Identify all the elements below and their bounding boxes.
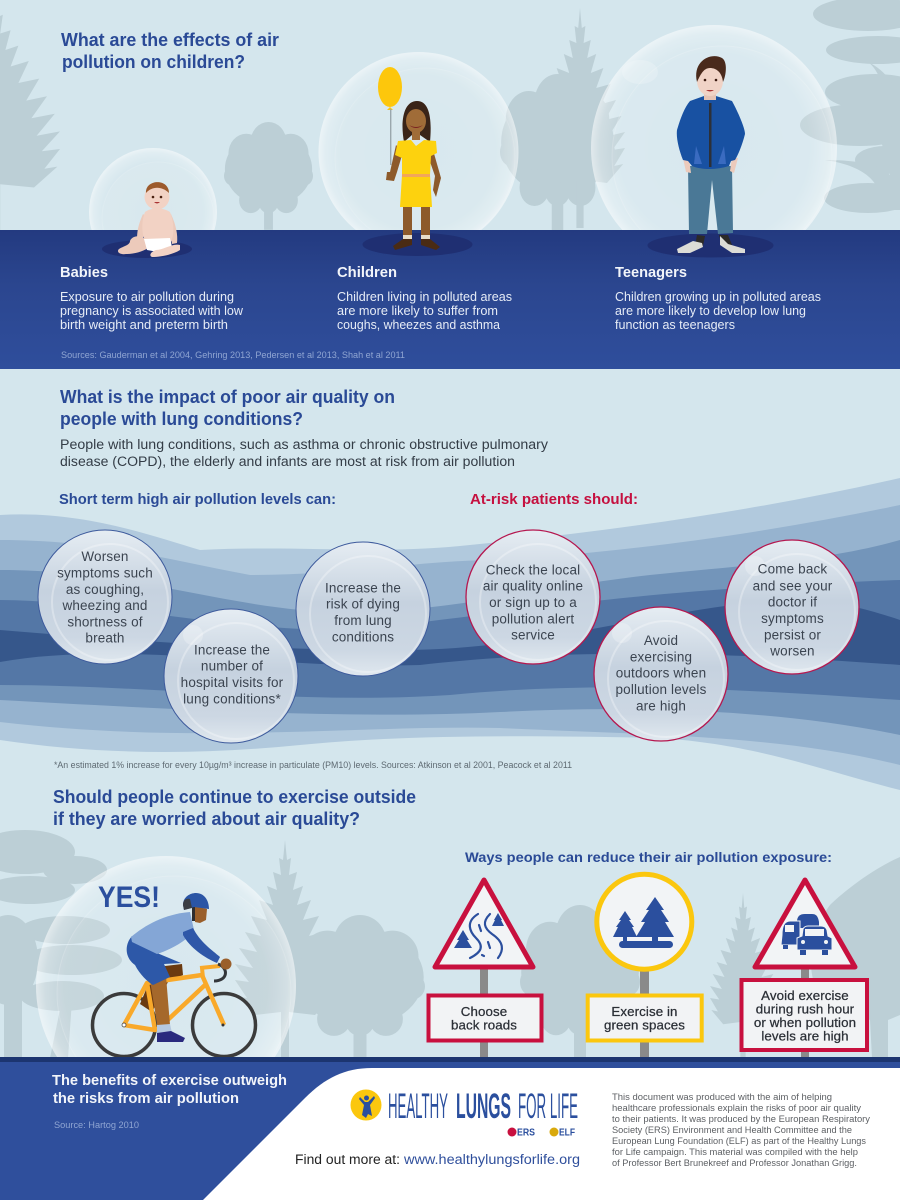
sign: green spaces bbox=[588, 874, 702, 1058]
bubble: worsen symptoms: breath bbox=[85, 631, 125, 646]
find out more link bbox=[295, 1152, 580, 1167]
logo: Healthy Lungs for Life: ELF bbox=[559, 1128, 575, 1138]
bubble: see your doctor: persist or bbox=[764, 627, 821, 642]
bubble: see your doctor bbox=[725, 540, 859, 674]
text block: benefits bbox=[52, 1072, 287, 1107]
bubble: risk of dying: from lung bbox=[334, 613, 392, 628]
text block: teenagers: Children growing up in polluted areas bbox=[615, 290, 821, 304]
panel: footer: FOR LIFE bbox=[518, 1087, 578, 1126]
bubble: child bbox=[318, 52, 518, 252]
sign: green spaces: Exercise in bbox=[611, 1004, 678, 1019]
bubble: hospital visits: hospital visits for bbox=[181, 675, 284, 690]
bubble: check air quality: pollution alert bbox=[492, 611, 574, 626]
icon: trees bbox=[613, 897, 674, 948]
figure: child with balloon bbox=[378, 67, 441, 250]
ground line bbox=[0, 1057, 900, 1062]
text block: children bbox=[337, 265, 512, 332]
logo: Healthy Lungs for Life: ERS bbox=[517, 1128, 535, 1138]
sign: rush hour: during rush hour bbox=[756, 1002, 855, 1017]
disclaimer paragraph: This document was produced with the aim of helping bbox=[612, 1092, 832, 1102]
navy band bbox=[0, 230, 900, 369]
text block: babies: Exposure to air pollution during bbox=[60, 290, 234, 304]
bubble: baby bbox=[89, 148, 217, 276]
bubble: risk of dying: conditions bbox=[332, 629, 394, 644]
sign: green spaces: green spaces bbox=[604, 1018, 685, 1032]
icon: traffic cars bbox=[781, 914, 832, 955]
panel: effects on children bbox=[0, 0, 900, 369]
shadow: child bbox=[362, 233, 472, 256]
background trees bottom bbox=[0, 830, 900, 1060]
bubble: avoid exercising: outdoors when bbox=[616, 666, 706, 681]
disclaimer paragraph: Society (ERS) Environment and Health Committee and the bbox=[612, 1125, 852, 1135]
bubble: hospital visits: lung conditions* bbox=[183, 691, 281, 706]
bubble: worsen symptoms: Worsen bbox=[81, 549, 129, 564]
sign: rush hour bbox=[742, 880, 867, 1058]
find out more link: www.healthylungsforlife.org bbox=[403, 1152, 580, 1167]
bubble: risk of dying: Increase the bbox=[325, 580, 401, 595]
panel: footer bbox=[0, 1057, 900, 1200]
logo: Healthy Lungs for Life: HEALTHY bbox=[388, 1087, 448, 1126]
bubble: avoid exercising: Avoid bbox=[644, 633, 678, 648]
panel: lung conditions bbox=[0, 387, 900, 790]
bubble: check air quality: Check the local bbox=[486, 562, 580, 577]
background trees top bbox=[0, 0, 900, 237]
bubble: check air quality bbox=[466, 530, 600, 664]
subheading: at-risk: At-risk patients should: bbox=[470, 491, 638, 508]
bubble: check air quality: air quality online bbox=[483, 579, 583, 594]
bubble: see your doctor: Come back bbox=[758, 562, 827, 577]
bubble: hospital visits bbox=[164, 609, 298, 743]
bubble: check air quality: or sign up to a bbox=[489, 595, 577, 610]
sign: rush hour: or when pollution bbox=[754, 1015, 856, 1030]
intro text bbox=[60, 437, 548, 469]
pollution waves bbox=[0, 478, 900, 790]
heading: exercise bbox=[53, 787, 416, 829]
text block: benefits: the risks from air pollution bbox=[53, 1090, 239, 1107]
disclaimer paragraph: of Professor Bert Brunekreef and Professor Jonathan Grigg. bbox=[612, 1158, 857, 1168]
shadow: baby bbox=[102, 240, 192, 258]
logo: Healthy Lungs for Life bbox=[350, 1087, 578, 1138]
sign: rush hour: Avoid exercise bbox=[761, 988, 849, 1003]
bubble: avoid exercising bbox=[594, 607, 728, 741]
figure: teenager bbox=[677, 56, 745, 253]
logo: Healthy Lungs for Life: LUNGS bbox=[456, 1087, 511, 1126]
bubble: avoid exercising: exercising bbox=[630, 650, 692, 665]
subheading: ways to reduce: Ways people can reduce their air pollution exposure: bbox=[465, 849, 832, 865]
disclaimer paragraph: to their patients. It was produced by the European Respiratory bbox=[612, 1114, 871, 1124]
bubble: teenager bbox=[591, 25, 837, 271]
title: effects on children: pollution on children? bbox=[62, 52, 245, 72]
heading: lung conditions: people with lung conditions? bbox=[60, 409, 303, 429]
title: effects on children: What are the effects of air bbox=[61, 30, 279, 50]
disclaimer paragraph: for Life campaign. This material was compiled with the help bbox=[612, 1147, 858, 1157]
subheading: short term: Short term high air pollution levels can: bbox=[59, 491, 336, 508]
shadow: teenager bbox=[648, 234, 774, 258]
white footer panel bbox=[203, 1068, 900, 1200]
text block: benefits: The benefits of exercise outweigh bbox=[52, 1072, 287, 1089]
text block: babies bbox=[60, 265, 244, 332]
sign: back roads bbox=[428, 880, 542, 1058]
bubble: avoid exercising: pollution levels bbox=[616, 682, 707, 697]
text block: teenagers bbox=[615, 265, 821, 332]
bubble: see your doctor: and see your bbox=[753, 578, 833, 593]
text block: babies: Babies bbox=[60, 265, 108, 281]
bubble: worsen symptoms: shortness of bbox=[67, 615, 143, 630]
bubble: worsen symptoms: wheezing and bbox=[61, 598, 148, 613]
footnote: *An estimated 1% increase for every 10µg/m³ increase in particulate (PM10) levels. Sources: Atkinson et al 2001, Peacock et al 2011 bbox=[54, 760, 572, 770]
text block: teenagers: Teenagers bbox=[615, 265, 687, 281]
bubble: hospital visits: number of bbox=[201, 659, 263, 674]
bubble: risk of dying: risk of dying bbox=[326, 597, 400, 612]
bubble: worsen symptoms: symptoms such bbox=[57, 566, 153, 581]
heading: lung conditions bbox=[60, 387, 395, 429]
bubble: worsen symptoms: as coughing, bbox=[66, 582, 144, 597]
bubble: worsen symptoms bbox=[38, 530, 172, 664]
text block: babies: birth weight and preterm birth bbox=[60, 318, 228, 332]
bubble: hospital visits: Increase the bbox=[194, 642, 270, 657]
sign: back roads: back roads bbox=[451, 1018, 517, 1032]
text block: children: are more likely to suffer from bbox=[337, 304, 498, 318]
bubble: see your doctor: doctor if bbox=[768, 595, 817, 610]
heading: exercise: if they are worried about air quality? bbox=[53, 809, 360, 829]
icon: winding road bbox=[454, 913, 504, 958]
title: effects on children bbox=[61, 30, 279, 72]
sign: rush hour: levels are high bbox=[761, 1029, 849, 1044]
sign: back roads: Choose bbox=[461, 1004, 507, 1019]
bubble: cyclist bbox=[36, 856, 296, 1116]
disclaimer paragraph: European Lung Foundation (ELF) as part of the Healthy Lungs bbox=[612, 1136, 866, 1146]
intro text: People with lung conditions, such as asthma or chronic obstructive pulmonary bbox=[60, 437, 548, 452]
bubble: see your doctor: symptoms bbox=[761, 611, 824, 626]
intro text: disease (COPD), the elderly and infants are most at risk from air pollution bbox=[60, 454, 515, 469]
disclaimer paragraph: healthcare professionals explain the risks of poor air quality bbox=[612, 1103, 862, 1113]
panel: exercise bbox=[0, 787, 900, 1116]
bubble: see your doctor: worsen bbox=[769, 644, 815, 659]
text block: children: coughs, wheezes and asthma bbox=[337, 318, 500, 332]
footer band bbox=[0, 1062, 900, 1200]
bubble: risk of dying bbox=[296, 542, 430, 676]
bubble: avoid exercising: are high bbox=[636, 698, 686, 713]
text block: children: Children living in polluted areas bbox=[337, 290, 512, 304]
text block: teenagers: function as teenagers bbox=[615, 318, 735, 332]
text block: children: Children bbox=[337, 265, 397, 281]
text block: babies: pregnancy is associated with low bbox=[60, 304, 244, 318]
bubble: check air quality: service bbox=[511, 627, 555, 642]
heading: lung conditions: What is the impact of poor air quality on bbox=[60, 387, 395, 407]
heading: exercise: Should people continue to exercise outside bbox=[53, 787, 416, 807]
figure: cyclist bbox=[92, 893, 256, 1056]
figure: baby bbox=[118, 182, 180, 257]
source: Hartog: Source: Hartog 2010 bbox=[54, 1120, 139, 1130]
sources: children: Sources: Gauderman et al 2004, Gehring 2013, Pedersen et al 2013, Shah et al 2011 bbox=[61, 350, 405, 360]
text block: teenagers: are more likely to develop low lung bbox=[615, 304, 806, 318]
YES label: YES! bbox=[98, 881, 160, 914]
find out more link: Find out more at: bbox=[295, 1152, 400, 1167]
disclaimer paragraph bbox=[612, 1092, 871, 1168]
